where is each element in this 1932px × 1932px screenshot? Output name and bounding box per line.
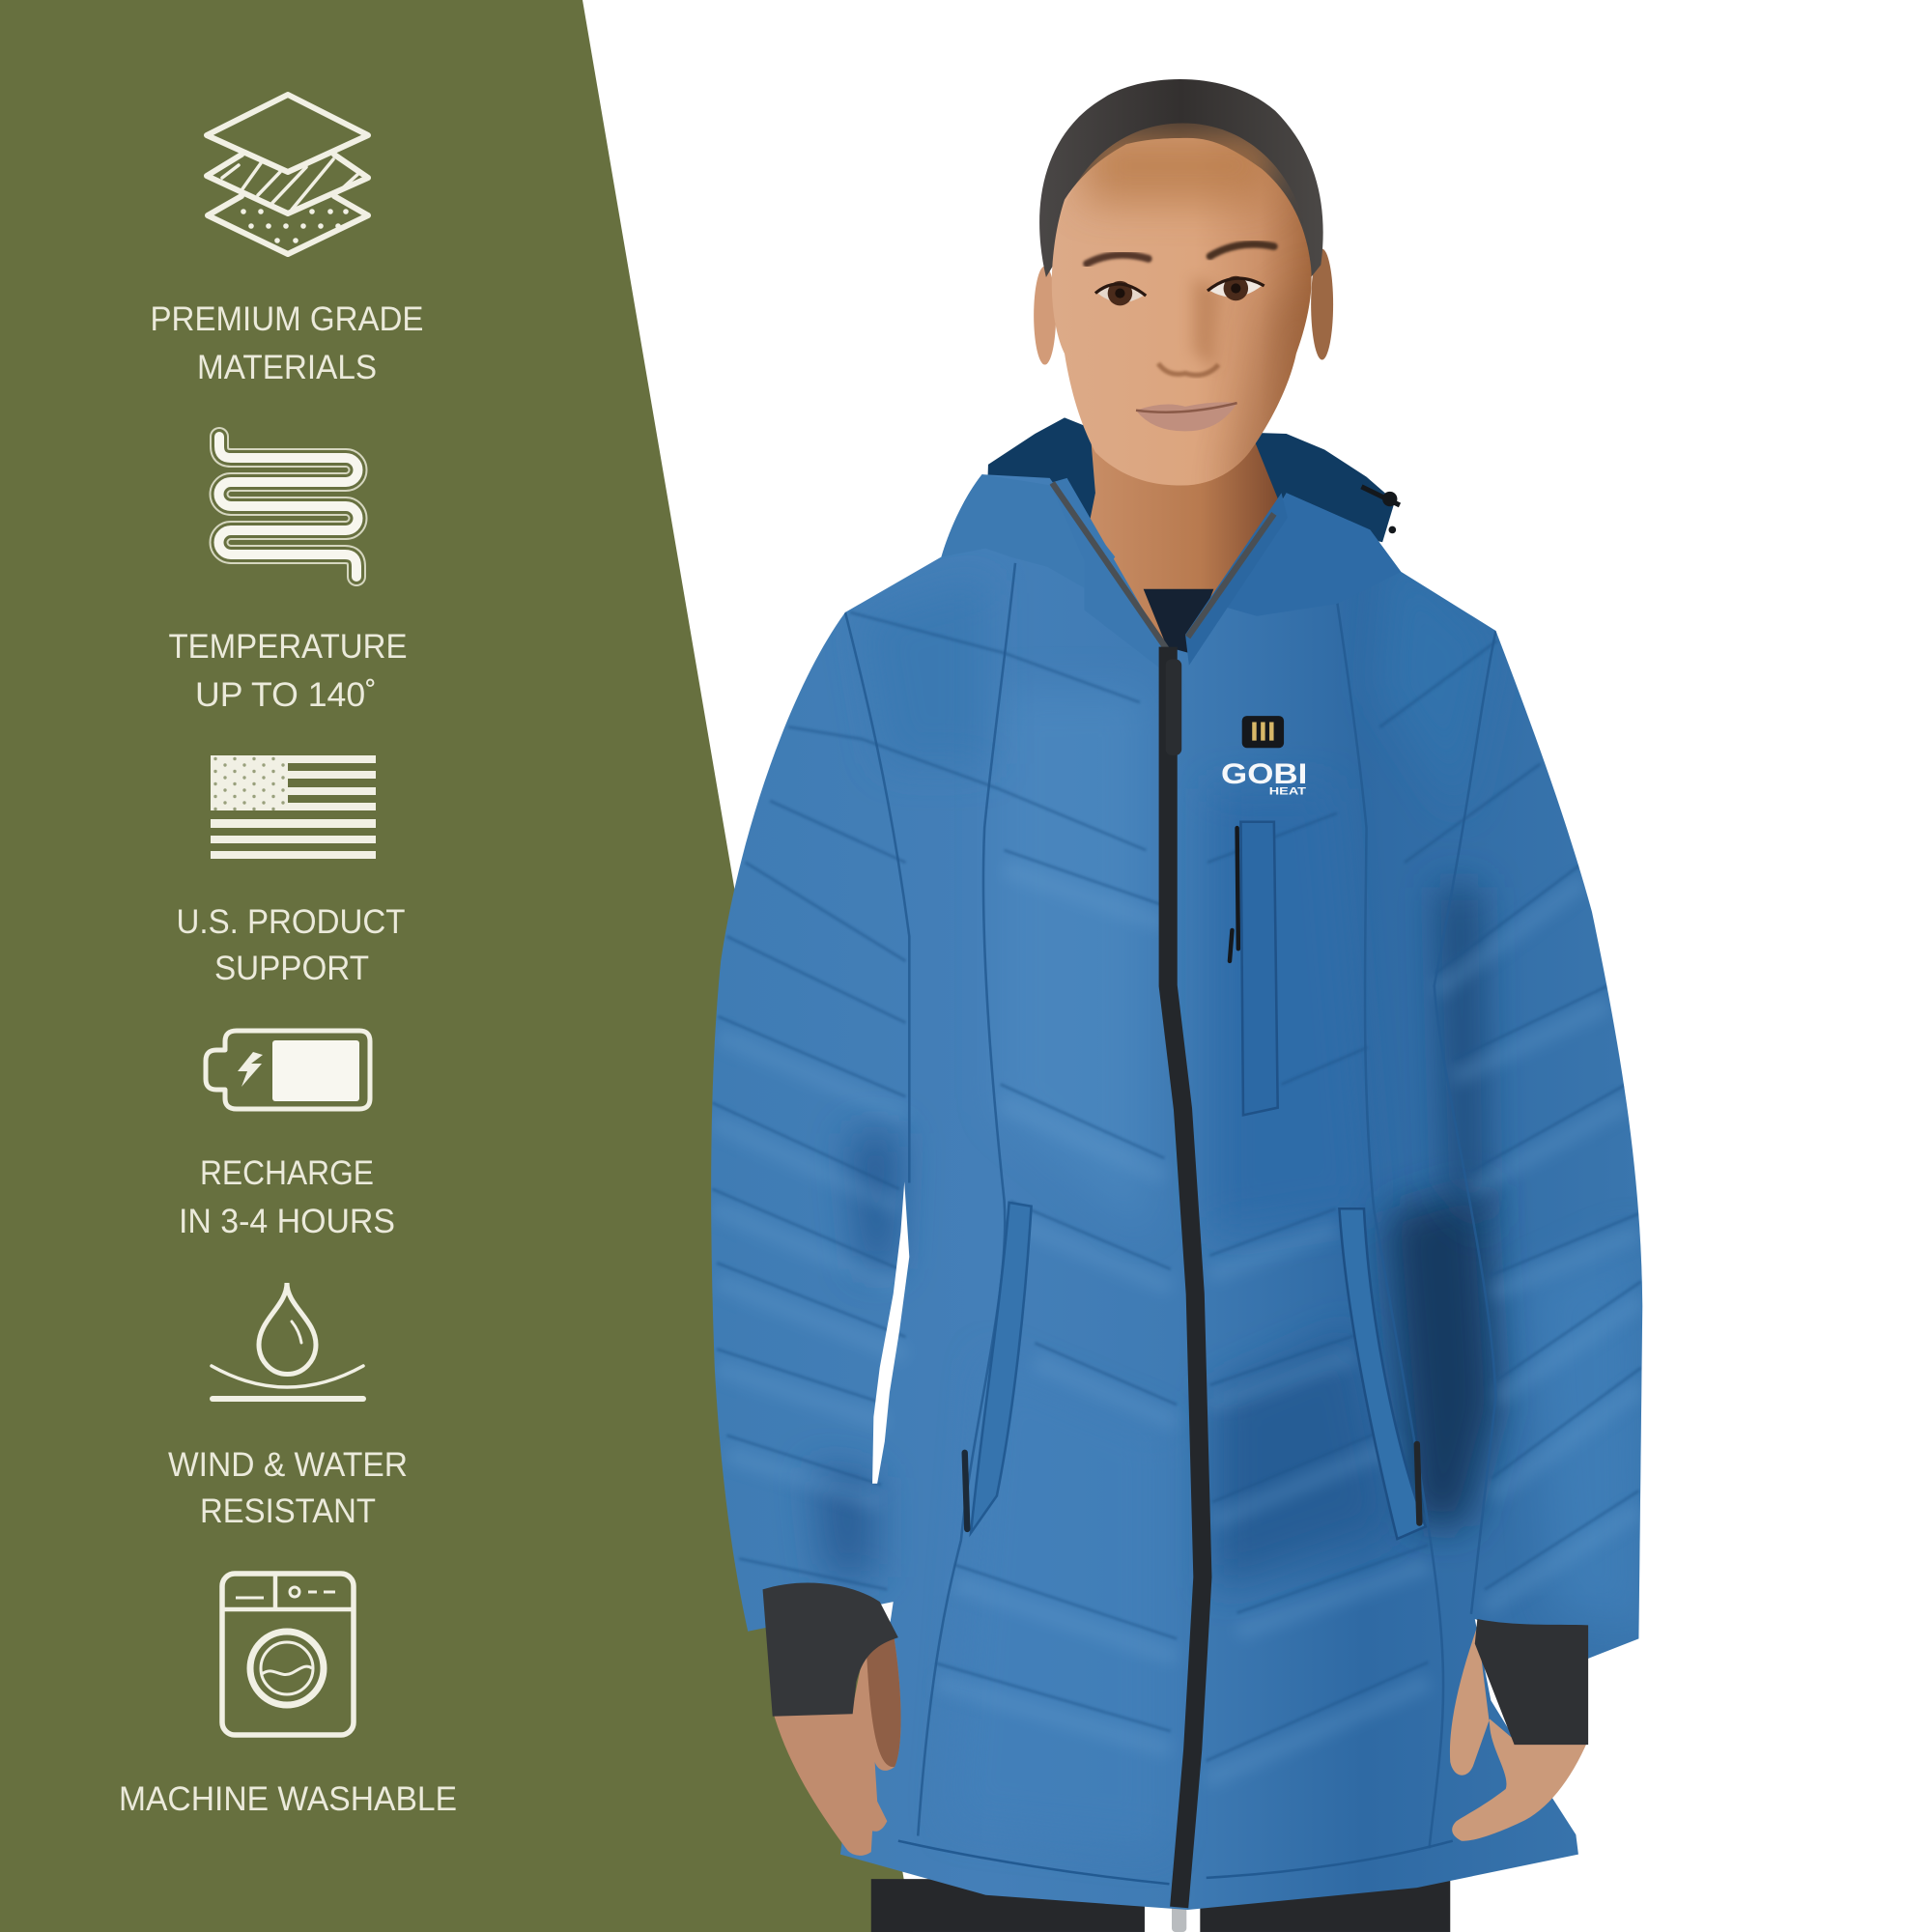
panel: green feature sidebar <box>0 0 913 1932</box>
shirt under collar <box>1144 589 1213 653</box>
label: U.S. product support: U.S. PRODUCT <box>176 903 406 941</box>
feature: recharge in 3-4 hours <box>179 1031 395 1240</box>
icon: washing machine <box>222 1574 354 1735</box>
hem zipper pull <box>1172 1904 1186 1932</box>
label: machine washable: MACHINE WASHABLE <box>119 1780 457 1818</box>
left hand <box>773 1633 901 1856</box>
feature: U.S. product support <box>176 755 406 987</box>
left cuff <box>763 1582 898 1717</box>
pocket outline <box>971 1203 1032 1533</box>
right hand <box>1450 1627 1588 1841</box>
label: U.S. product support: SUPPORT <box>214 950 369 987</box>
label: premium grade materials: PREMIUM GRADE <box>151 300 423 338</box>
icon: water drop on surface <box>212 1283 363 1399</box>
neck <box>1078 419 1282 666</box>
right cuff <box>1475 1619 1588 1745</box>
label: temperature up to 140: UP TO 140˚ <box>195 676 377 714</box>
face <box>1052 138 1312 486</box>
hair <box>1039 79 1323 277</box>
pocket zip pull <box>965 1453 967 1529</box>
feature: temperature up to 140 <box>168 437 408 714</box>
right hood panel <box>1213 493 1401 616</box>
quilt stitch lines <box>712 612 1641 1761</box>
right eye <box>1208 276 1264 300</box>
head <box>1034 79 1333 493</box>
feature: premium grade materials <box>151 95 423 386</box>
hood lining <box>985 417 1395 542</box>
pocket outline <box>1339 1208 1426 1539</box>
pocket seam <box>1240 822 1278 1115</box>
Gobi Heat logo: GOBI <box>1221 758 1307 790</box>
right eyebrow <box>1210 244 1274 256</box>
pocket zip pull <box>1417 1444 1419 1523</box>
hood drawcord toggle <box>1361 487 1400 533</box>
feature: machine washable <box>119 1574 457 1818</box>
label: recharge in 3-4 hours: IN 3-4 HOURS <box>179 1203 395 1240</box>
hood and collar front <box>941 474 1401 671</box>
leggings <box>871 1879 1450 1932</box>
pocket zip <box>1230 828 1238 961</box>
icon: charging battery <box>206 1031 370 1109</box>
pocket flap <box>1240 822 1278 1115</box>
Gobi Heat logo <box>1221 758 1307 798</box>
photo: woman wearing blue heated parka <box>711 79 1645 1932</box>
face shading <box>1084 129 1324 493</box>
white gap between arm and body <box>872 1181 909 1484</box>
left thumb shadow <box>867 1633 901 1767</box>
label: wind and water resistant: RESISTANT <box>200 1492 376 1530</box>
Gobi Heat logo: HEAT <box>1269 786 1306 798</box>
main zipper <box>1168 647 1203 1907</box>
right hand pocket <box>1339 1208 1426 1539</box>
feature: wind and water resistant <box>168 1283 408 1530</box>
jacket body silhouette <box>711 474 1642 1910</box>
collar zip tape <box>1052 483 1274 649</box>
left collar flap <box>1050 478 1168 671</box>
label: wind and water resistant: WIND & WATER <box>168 1446 408 1484</box>
right ear <box>1311 249 1333 359</box>
icon: stacked material layers <box>207 95 368 254</box>
left ear <box>1034 267 1056 365</box>
left hood panel <box>941 474 1115 591</box>
left eyebrow <box>1087 255 1149 264</box>
left hand pocket <box>965 1203 1032 1533</box>
icon: american flag <box>211 755 376 859</box>
usb power port <box>1242 716 1284 748</box>
label: recharge in 3-4 hours: RECHARGE <box>200 1154 374 1192</box>
label: temperature up to 140: TEMPERATURE <box>168 628 408 666</box>
left eye <box>1095 281 1146 305</box>
right collar flap <box>1185 493 1288 666</box>
lips <box>1136 402 1237 431</box>
zipper pull <box>1166 659 1181 755</box>
nose <box>1158 363 1218 375</box>
label: premium grade materials: MATERIALS <box>197 349 377 386</box>
hem band <box>898 1841 1453 1884</box>
quilt puff highlights <box>712 868 1641 1780</box>
jacket shell <box>711 474 1645 1910</box>
chest pocket <box>1230 822 1278 1115</box>
panel seams <box>845 551 1495 1848</box>
jacket shading <box>712 542 1645 1884</box>
icon: heating coil <box>218 437 357 577</box>
